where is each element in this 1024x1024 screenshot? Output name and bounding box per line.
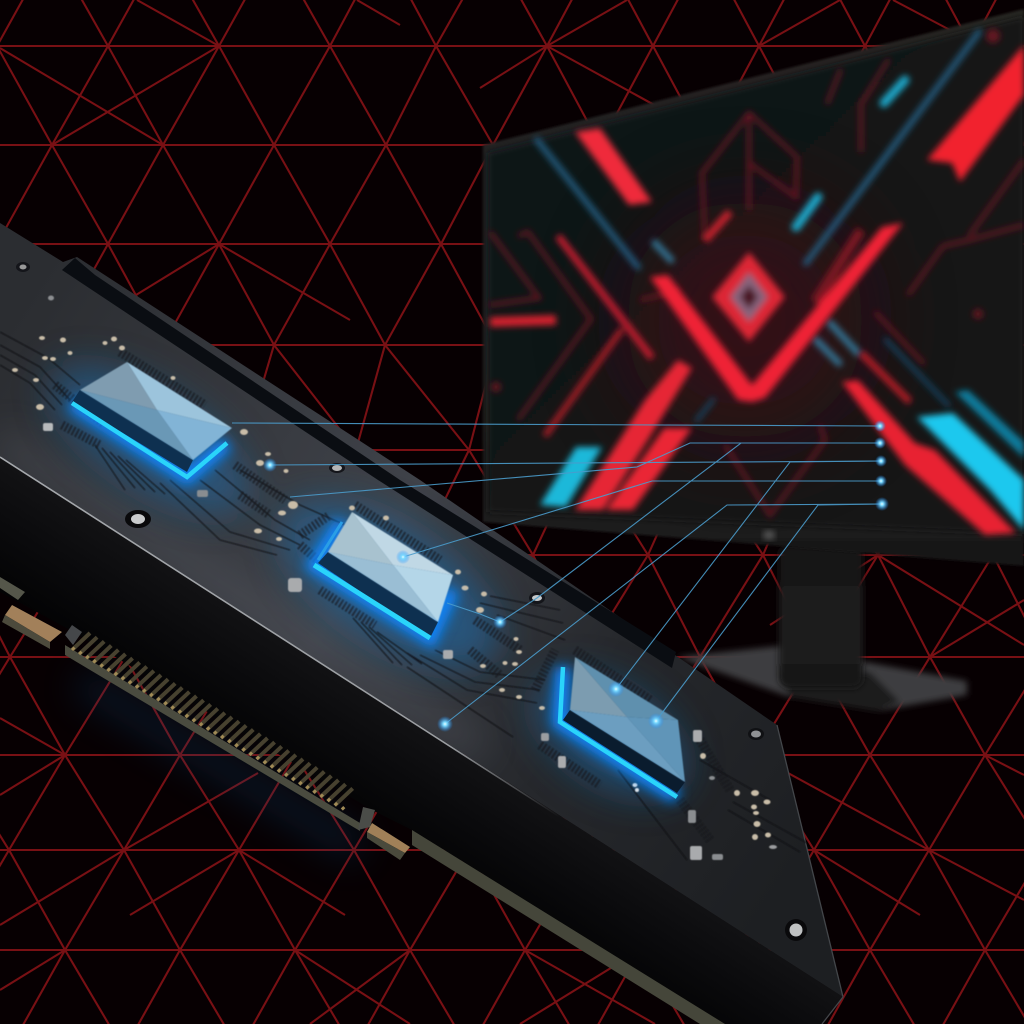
chip 3 top facets <box>570 657 685 782</box>
chip 1 top facets <box>80 362 232 460</box>
data link lines <box>232 423 882 724</box>
monitor screen <box>488 17 1024 535</box>
gold fingers <box>72 633 353 805</box>
dense chip pin arrays <box>55 352 730 840</box>
circuit traces <box>0 332 807 860</box>
chip 3 light strip <box>560 667 677 797</box>
blue board glow <box>27 337 707 822</box>
screw holes <box>16 262 807 941</box>
card right edge <box>777 725 843 1024</box>
screen art: dim red outlines <box>489 59 1024 515</box>
chip 1 glow <box>72 403 227 477</box>
chip 2 light strips <box>314 565 430 638</box>
screen art: red ambient glow <box>625 200 865 440</box>
card top face <box>0 223 843 997</box>
chip 3 <box>560 657 685 797</box>
chip 2 <box>314 512 453 638</box>
monitor stand neck <box>779 545 863 688</box>
card lower edge highlight <box>0 457 560 817</box>
chip 1 side wall <box>72 390 193 472</box>
finger tips <box>72 648 344 810</box>
graphics card <box>0 223 843 1024</box>
screen art: cyan shapes <box>540 390 1024 530</box>
left bracket tab <box>0 577 62 649</box>
monitor power light <box>763 530 775 540</box>
lighter band along lower face edge <box>0 440 480 748</box>
chip 2 glow <box>315 522 452 638</box>
screen art: blue streaks <box>537 32 979 420</box>
chip 1 <box>72 362 232 477</box>
right bracket tab <box>367 823 410 860</box>
blue glow behind card edge <box>80 680 360 850</box>
chip 3 side wall <box>563 710 685 793</box>
chip 3 glow <box>560 667 677 797</box>
small board components <box>12 296 777 860</box>
screen art: red shapes <box>490 45 1024 535</box>
glowing end points <box>263 420 889 732</box>
connector notches <box>65 625 82 645</box>
screen art: dim red dots <box>491 29 1000 392</box>
card side and underside <box>0 457 843 1024</box>
connector base strip <box>65 645 360 831</box>
chip 2 top facets <box>328 512 453 622</box>
monitor bezel <box>483 9 1024 566</box>
card lower edge strip <box>412 830 725 1024</box>
edge connector <box>65 625 375 831</box>
chip 2 side wall <box>318 552 438 638</box>
monitor stand base <box>677 646 967 711</box>
chip 1 light strip <box>72 403 227 477</box>
monitor <box>483 9 1024 711</box>
top mounting rail <box>62 258 676 668</box>
